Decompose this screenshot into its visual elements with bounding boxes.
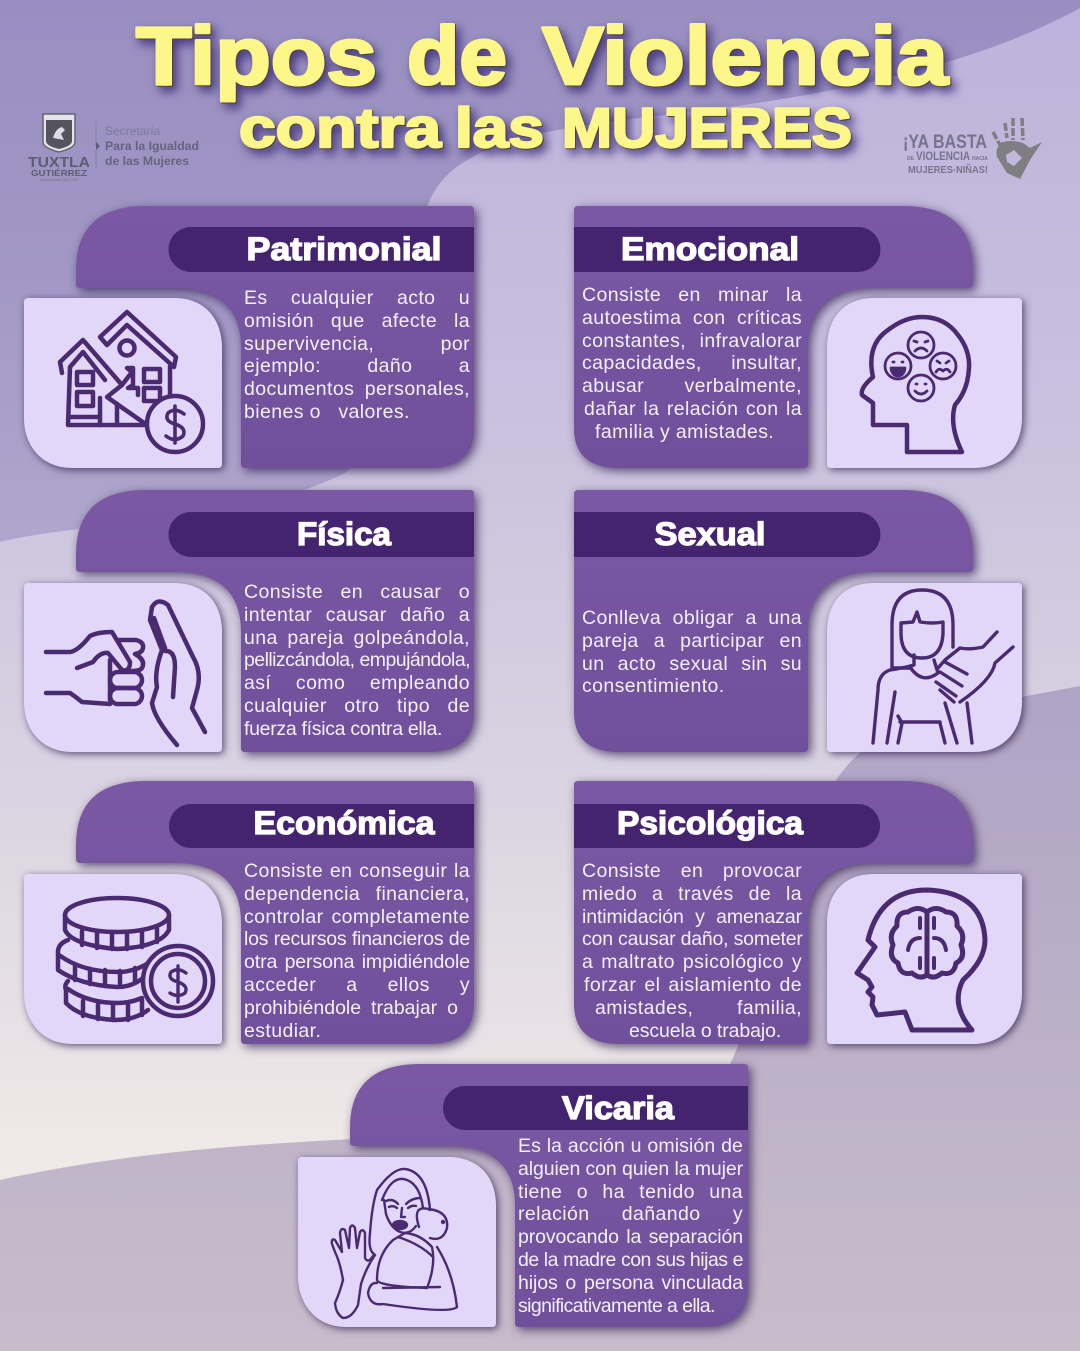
body text: dependencia financiera, (244, 883, 470, 905)
body text: constantes, infravalorar (582, 330, 802, 352)
icon tile (827, 583, 1022, 752)
card shape (350, 1064, 748, 1327)
body text: Conlleva obligar a una (582, 607, 802, 629)
body text: prohibiéndole trabajar o (244, 997, 458, 1019)
icon: mother holding baby (332, 1169, 457, 1318)
logo: Ya Basta: DE (907, 156, 915, 162)
title pill (169, 227, 474, 272)
logo: Ya Basta: ¡YA BASTA (903, 132, 987, 153)
logo: Tuxtla Gutiérrez: TUXTLA (28, 155, 91, 171)
body text: controlar completamente (244, 906, 470, 928)
heading: Patrimonial (246, 231, 442, 267)
body text: Es la acción u omisión de (518, 1135, 743, 1157)
body text: así como empleando (244, 672, 470, 694)
body text (518, 1135, 744, 1317)
body text: Consiste en causar o (244, 581, 470, 603)
title: Violencia (542, 11, 950, 102)
panel: Emocional (570, 202, 1030, 478)
body text (582, 284, 802, 443)
title: de (407, 11, 507, 102)
panel: Económica (20, 776, 484, 1054)
icon: fist and open hand (46, 601, 205, 745)
logo: Tuxtla Gutiérrez (28, 113, 199, 182)
icon tile (24, 874, 222, 1044)
body text: intimidación y amenazar (582, 906, 802, 928)
card shape (76, 781, 474, 1044)
icon: woman touched by a hand (873, 590, 1013, 743)
title: las (455, 96, 544, 159)
logo: Tuxtla Gutiérrez: GUTIÉRREZ (31, 168, 87, 178)
body text: intentar causar daño a (244, 604, 470, 626)
panel: Patrimonial (20, 202, 484, 478)
icon: houses and dollar (60, 312, 203, 452)
body text: abusar verbalmente, (582, 375, 802, 397)
body text: consentimiento. (582, 675, 725, 697)
body text: dañar la relación con la (584, 398, 802, 420)
body text: autoestima con críticas (582, 307, 802, 329)
body text: otra persona impidiéndole (244, 951, 470, 973)
body text: forzar el aislamiento de (584, 974, 802, 996)
body text (244, 860, 470, 1042)
title: MUJERES (562, 96, 852, 159)
card shape (574, 781, 973, 1044)
body text (244, 287, 470, 423)
body text: capacidades, insultar, (582, 352, 802, 374)
body text (244, 581, 470, 740)
body text: provocando la separación (518, 1226, 743, 1248)
icon tile (827, 874, 1022, 1044)
body text: una pareja golpeándola, (244, 627, 470, 649)
body text: tiene o ha tenido una (518, 1181, 743, 1203)
body text: cualquier otro tipo de (244, 695, 470, 717)
body text: un acto sexual sin su (582, 653, 802, 675)
body text: pellizcándola, empujándola, (244, 649, 470, 671)
title pill (574, 804, 880, 848)
body text: con causar daño, someter (582, 928, 803, 950)
body text: amistades, familia, (595, 997, 802, 1019)
icon tile (827, 298, 1022, 468)
icon: head with brain (857, 890, 985, 1030)
card shape (76, 206, 474, 468)
card shape (76, 490, 474, 752)
title pill (574, 227, 880, 272)
body text: relación dañando y (518, 1203, 743, 1225)
body text: pareja a participar en (582, 630, 802, 652)
body text: bienes o valores. (244, 401, 410, 423)
heading: Sexual (654, 516, 766, 552)
body text: documentos personales, (244, 378, 470, 400)
body text: a maltrato psicológico y (582, 951, 802, 973)
body text: hijos o persona vinculada (518, 1272, 743, 1294)
body text: los recursos financieros de (244, 928, 470, 950)
body text: significativamente a ella. (518, 1295, 715, 1317)
panel: Vicaria (294, 1060, 758, 1337)
card shape (574, 490, 973, 752)
body text (582, 860, 803, 1042)
title (134, 11, 962, 162)
icon: coins and dollar (58, 898, 213, 1020)
logo: Tuxtla Gutiérrez: Para la Igualdad (105, 139, 199, 153)
body text: alguien con quien la mujer (518, 1158, 743, 1180)
title pill (443, 1086, 748, 1130)
body text: acceder a ellos y (244, 974, 470, 996)
icon tile (24, 298, 222, 468)
icon tile (24, 583, 222, 752)
body text: supervivencia, por (244, 333, 470, 355)
body text: Consiste en provocar (582, 860, 802, 882)
heading: Económica (254, 805, 435, 841)
body text: Consiste en minar la (582, 284, 802, 306)
panel: Sexual (570, 486, 1030, 762)
body text: fuerza física contra ella. (244, 718, 442, 740)
logo: Tuxtla Gutiérrez: Secretaría (105, 124, 161, 138)
body text: de la madre con sus hijas e (518, 1249, 743, 1271)
icon: head with emotions (862, 317, 969, 452)
panel: Psicológica (570, 776, 1030, 1054)
heading: Emocional (621, 231, 799, 267)
logo: Ya Basta: HACIA (972, 156, 988, 162)
body text: estudiar. (244, 1020, 321, 1042)
title: Tipos (136, 11, 377, 102)
logo: Ya Basta: VIOLENCIA (916, 151, 970, 163)
title pill (574, 512, 880, 557)
heading: Psicológica (617, 805, 803, 841)
body text: Consiste en conseguir la (244, 860, 470, 882)
logo: Ya Basta (903, 118, 1042, 179)
body text: ejemplo: daño a (244, 355, 470, 377)
body text: escuela o trabajo. (629, 1020, 781, 1042)
logo: Ya Basta: MUJERES·NIÑAS! (908, 163, 988, 176)
logo: Tuxtla Gutiérrez: de las Mujeres (105, 154, 189, 168)
heading: Física (297, 516, 391, 552)
title pill (169, 512, 474, 557)
body text: Es cualquier acto u (244, 287, 470, 309)
title: contra (239, 96, 442, 159)
icon tile (298, 1157, 496, 1327)
body text: miedo a través de la (582, 883, 802, 905)
logo: Tuxtla Gutiérrez: Ayuntamiento 2021-2024 (39, 178, 79, 182)
panel: Física (20, 486, 484, 762)
body text (582, 607, 802, 697)
card shape (574, 206, 973, 468)
title pill (169, 804, 474, 848)
body text: familia y amistades. (595, 421, 774, 443)
body text: omisión que afecte la (244, 310, 470, 332)
heading: Vicaria (562, 1090, 674, 1126)
